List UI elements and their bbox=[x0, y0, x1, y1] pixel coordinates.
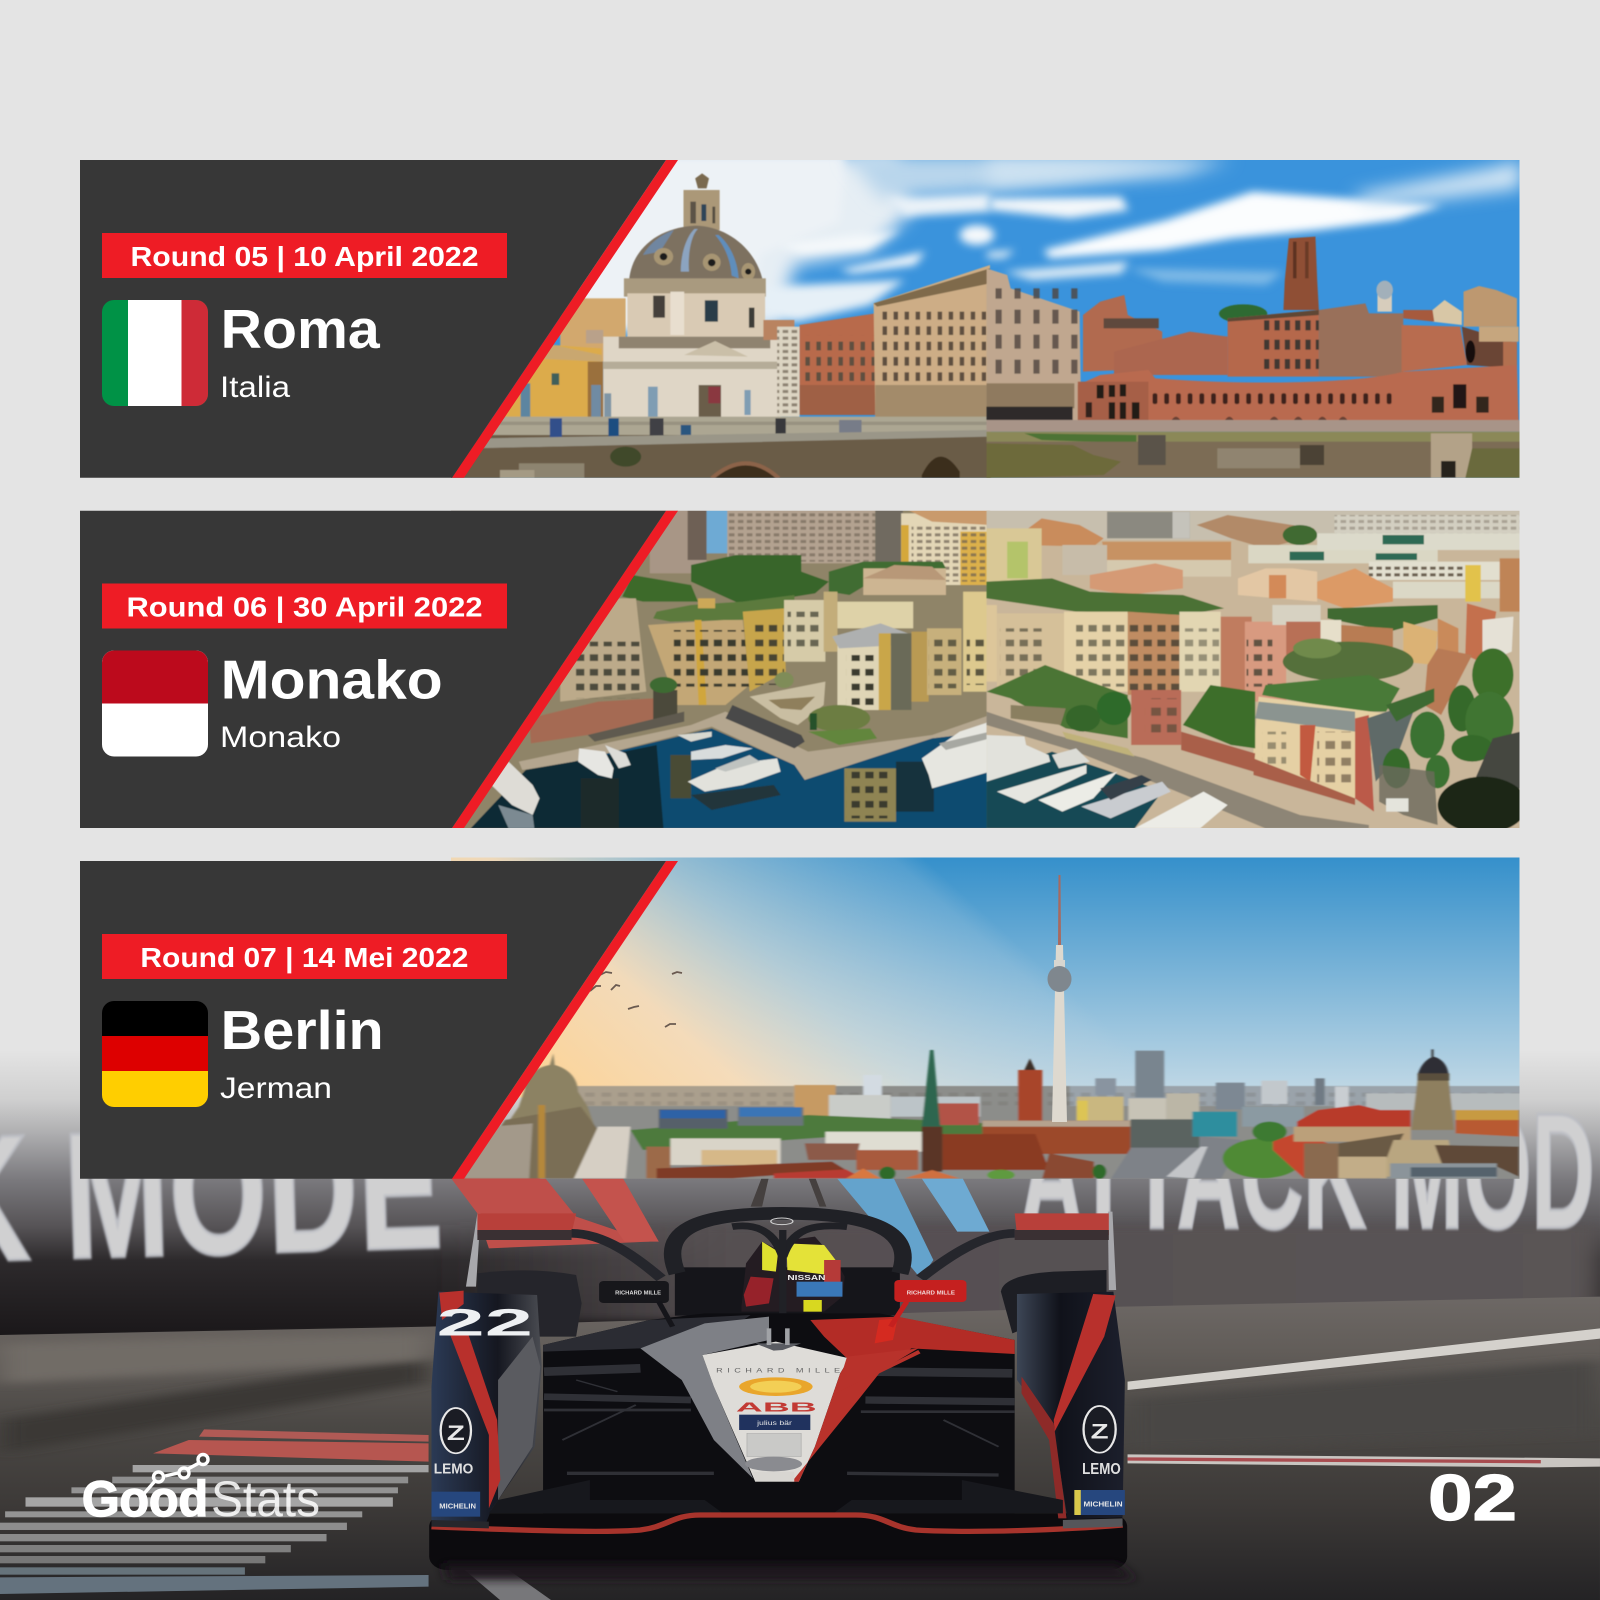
yachts bbox=[578, 748, 614, 778]
palms and dark trees bbox=[1383, 748, 1410, 788]
date badge bbox=[102, 584, 507, 628]
city name: Roma bbox=[221, 298, 380, 360]
bottom photo: race car on track bbox=[0, 1050, 1600, 1600]
walkway and ruin wall bbox=[481, 430, 990, 448]
city name: Monako bbox=[221, 648, 443, 710]
logo: GoodStats bbox=[82, 1454, 320, 1527]
track wall and road bbox=[0, 1050, 1600, 1600]
trees bbox=[1219, 304, 1267, 323]
road bbox=[987, 712, 1369, 828]
nikolai church bbox=[922, 1050, 940, 1127]
logo: GoodStats: Good bbox=[82, 1471, 208, 1527]
race car bbox=[429, 1177, 1136, 1580]
plaza bbox=[750, 682, 825, 725]
river bbox=[574, 1127, 630, 1178]
nose cone bbox=[640, 1317, 921, 1482]
halo bbox=[673, 1213, 903, 1313]
abb: ABB bbox=[736, 1401, 817, 1415]
logo: GoodStats: Stats bbox=[211, 1471, 320, 1527]
roof gardens bbox=[1283, 642, 1414, 682]
cathedral bbox=[471, 1053, 598, 1178]
mirror right: RICHARD MILLE bbox=[907, 1290, 955, 1296]
dark title block bbox=[80, 861, 666, 1179]
horizon haze bbox=[540, 1086, 1524, 1186]
mirror left: RICHARD MILLE bbox=[615, 1291, 661, 1296]
mirror right bbox=[891, 1280, 966, 1327]
flag: Italy bbox=[102, 300, 208, 406]
main body bbox=[543, 1313, 1015, 1513]
rear wing left bbox=[466, 1213, 661, 1287]
garden block bbox=[1252, 697, 1384, 798]
greenery terrace bbox=[691, 555, 829, 605]
trees and spree bbox=[630, 1115, 987, 1150]
apartment blocks bbox=[560, 598, 646, 702]
water and yachts bbox=[987, 752, 1162, 828]
tower blocks bbox=[704, 510, 728, 553]
date badge: Round 06 | 30 April 2022 bbox=[126, 592, 482, 622]
suspension bars bbox=[544, 1368, 1015, 1475]
dark title block bbox=[80, 160, 666, 478]
white stepped blocks bbox=[1248, 545, 1438, 563]
country name: Jerman bbox=[220, 1072, 332, 1105]
country name: Monako bbox=[220, 721, 341, 754]
cockpit bbox=[675, 1267, 900, 1316]
date badge: Round 05 | 10 April 2022 bbox=[130, 241, 478, 272]
helmet: NISSAN bbox=[787, 1273, 825, 1282]
diagonal red stripe bbox=[452, 511, 678, 828]
dark title block bbox=[80, 511, 666, 828]
flag: Monaco bbox=[102, 650, 208, 756]
logo trend line bbox=[142, 1454, 208, 1496]
panel: Berlin bbox=[80, 858, 1524, 1186]
left sidepod: Z bbox=[447, 1422, 465, 1445]
red podium block bbox=[1131, 690, 1181, 745]
shadow and wheels bbox=[429, 1513, 1127, 1570]
wall lettering right: ATTACK MOD bbox=[1020, 1078, 1595, 1263]
panel: Monako bbox=[80, 505, 1527, 838]
nose cone: julius bär bbox=[756, 1419, 792, 1427]
boulevard bbox=[1111, 1137, 1242, 1178]
shell logo bbox=[739, 1377, 813, 1396]
church bbox=[683, 190, 720, 230]
hedges bbox=[1183, 685, 1255, 748]
left sidepod: 22 bbox=[437, 1300, 533, 1344]
right sidepod: Z bbox=[1091, 1420, 1109, 1444]
photo: Monaco harbour bbox=[450, 505, 1527, 838]
tan buildings behind the church bbox=[560, 298, 626, 362]
left sidepod: LEMO bbox=[434, 1460, 473, 1477]
middle blocks bbox=[997, 613, 1066, 688]
left palazzo bbox=[987, 268, 1081, 422]
diagonal red stripe bbox=[452, 160, 678, 478]
tv tower bbox=[1048, 875, 1072, 1122]
page number: 02 bbox=[1428, 1461, 1517, 1534]
terrace railing bbox=[488, 417, 991, 435]
red town hall bbox=[1018, 1070, 1042, 1122]
photo: Rome skyline bbox=[450, 155, 1535, 488]
low red building bbox=[529, 698, 657, 743]
railing and grounds bbox=[987, 420, 1520, 432]
left sidepod: MICHELIN bbox=[439, 1502, 476, 1510]
photo: Berlin skyline bbox=[451, 858, 1524, 1186]
panel: Roma bbox=[80, 155, 1535, 488]
foreground buildings bbox=[825, 1132, 922, 1152]
front wing bbox=[431, 1480, 1123, 1531]
date badge bbox=[102, 233, 507, 278]
harbour water bbox=[471, 728, 990, 828]
birds bbox=[590, 972, 682, 1027]
wall chevrons bbox=[450, 1177, 989, 1278]
date badge: Round 07 | 14 Mei 2022 bbox=[140, 942, 468, 973]
quay bbox=[519, 712, 990, 780]
diagonal red stripe bbox=[452, 861, 678, 1179]
trajan market hemicycle bbox=[1078, 365, 1519, 423]
flag: Germany bbox=[102, 1001, 208, 1107]
mirror left bbox=[599, 1281, 673, 1327]
left sidepod bbox=[431, 1291, 542, 1522]
mid brick buildings bbox=[1114, 332, 1228, 375]
sky and clouds bbox=[450, 155, 1535, 488]
greens band bbox=[987, 578, 1224, 615]
road markings bbox=[0, 1328, 1600, 1600]
ruin wall base bbox=[450, 433, 991, 480]
right sidepod bbox=[1017, 1292, 1125, 1519]
background blocks bbox=[794, 1085, 836, 1122]
helmet bbox=[741, 1237, 845, 1312]
buildings right of church bbox=[763, 320, 794, 340]
country name: Italia bbox=[220, 371, 290, 404]
trees bbox=[1223, 1138, 1303, 1178]
rear tyres bbox=[477, 1270, 582, 1337]
rear wing right bbox=[921, 1212, 1116, 1290]
right sidepod: MICHELIN bbox=[1084, 1500, 1123, 1508]
right sidepod: LEMO bbox=[1082, 1460, 1121, 1477]
old town hall bbox=[1273, 1133, 1335, 1178]
city name: Berlin bbox=[221, 999, 384, 1061]
date badge bbox=[102, 934, 507, 979]
torre delle milizie bbox=[1283, 237, 1319, 310]
nose cone: RICHARD MILLE bbox=[716, 1367, 840, 1374]
